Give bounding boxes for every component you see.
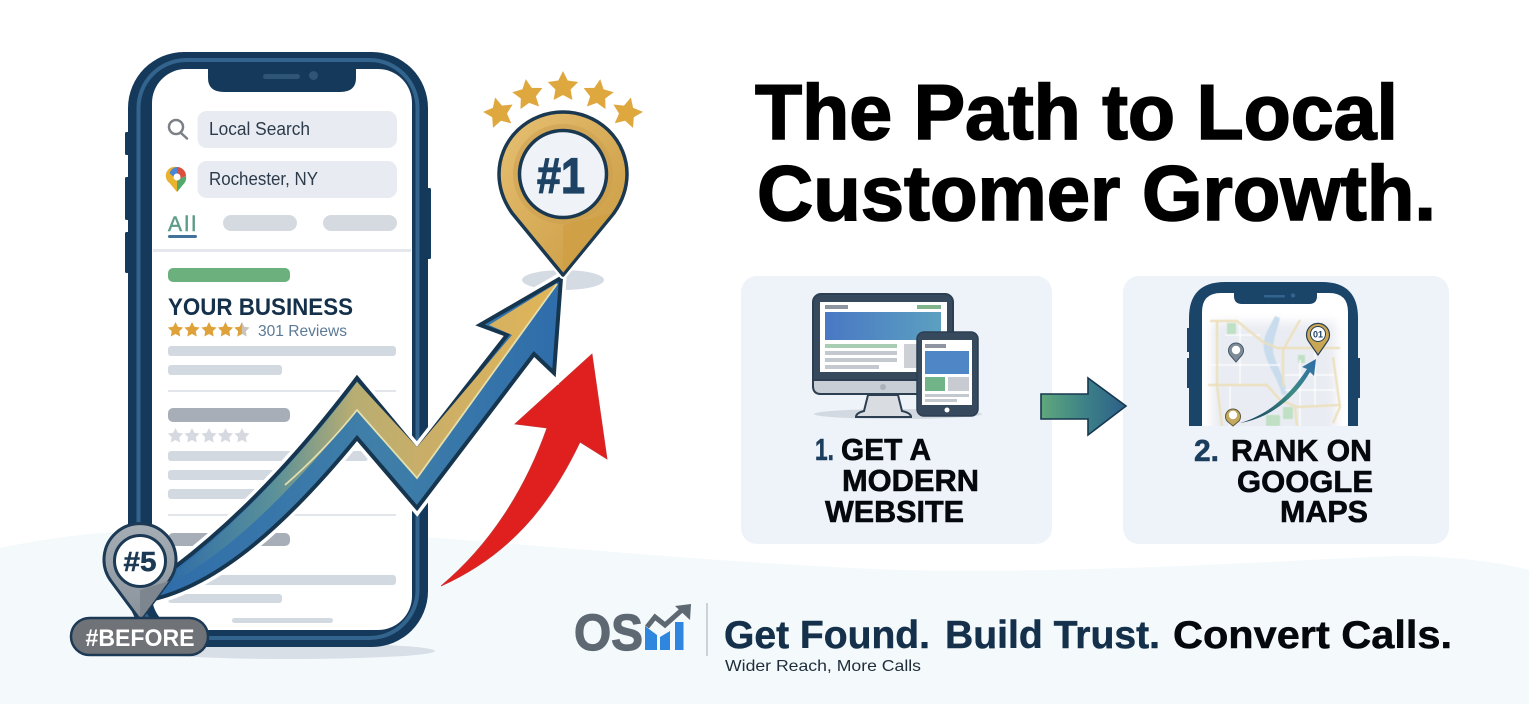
step 1 label: 1.	[815, 432, 834, 467]
pin #1: #1	[537, 148, 585, 204]
panel: step 1	[741, 276, 1052, 544]
step 2 label: GOOGLE	[1237, 464, 1373, 499]
step 2 label: MAPS	[1280, 494, 1368, 529]
step 1 label: WEBSITE	[825, 494, 964, 529]
map	[1208, 316, 1340, 437]
tagline: Build Trust.	[945, 614, 1160, 657]
top result: 301 Reviews	[258, 323, 347, 340]
tagline: Convert Calls.	[1173, 614, 1452, 657]
phone side buttons	[125, 132, 431, 273]
notch	[208, 67, 356, 92]
phone body	[128, 52, 428, 647]
background wave	[0, 528, 1529, 704]
step 2 label: RANK ON	[1231, 433, 1372, 468]
arrow between steps	[1041, 378, 1126, 435]
title	[755, 68, 1436, 237]
top result	[168, 268, 396, 375]
title: The Path to Local	[755, 68, 1398, 156]
panel: step 2	[1123, 276, 1449, 544]
search field	[198, 111, 397, 148]
title: Customer Growth.	[757, 149, 1436, 237]
icon: desktop monitor and tablet	[813, 294, 982, 419]
tagline	[724, 614, 1452, 657]
five stars	[480, 71, 646, 129]
map pin grey	[1229, 343, 1244, 362]
step 1 label	[815, 432, 979, 529]
map pin gold: 01	[1313, 330, 1323, 340]
logo: OS	[574, 604, 643, 661]
before tag	[71, 618, 208, 655]
sub tagline: Wider Reach, More Calls	[725, 658, 921, 675]
red arrow	[441, 354, 607, 586]
step 1 label: GET A	[841, 432, 931, 467]
logo	[574, 604, 691, 661]
second result	[168, 408, 368, 499]
tagline: Get Found.	[724, 614, 930, 657]
search field: Local Search	[209, 119, 310, 139]
step 2 label	[1194, 433, 1373, 529]
phone mockup	[125, 52, 435, 659]
tabs: All	[168, 213, 196, 236]
top result: YOUR BUSINESS	[168, 294, 353, 321]
icon: maps pin	[166, 167, 186, 192]
step 2 label: 2.	[1194, 433, 1219, 468]
icon: phone with map	[1187, 282, 1360, 437]
map pin start	[1226, 409, 1241, 426]
rating stars	[168, 322, 250, 336]
tabs	[168, 213, 397, 238]
location field	[198, 161, 397, 198]
map arrow	[1240, 359, 1316, 423]
location field: Rochester, NY	[209, 169, 318, 189]
phone shadow	[145, 643, 435, 659]
before tag: #BEFORE	[86, 625, 194, 652]
growth arrow	[150, 278, 561, 600]
pin #1	[499, 112, 627, 275]
map pin gold	[1306, 323, 1329, 355]
pin #5: #5	[124, 546, 156, 577]
search icon	[169, 120, 187, 138]
third result	[168, 533, 396, 623]
pin #5	[104, 524, 176, 620]
shadow under #1 pin	[522, 270, 604, 290]
step 1 label: MODERN	[842, 463, 979, 498]
